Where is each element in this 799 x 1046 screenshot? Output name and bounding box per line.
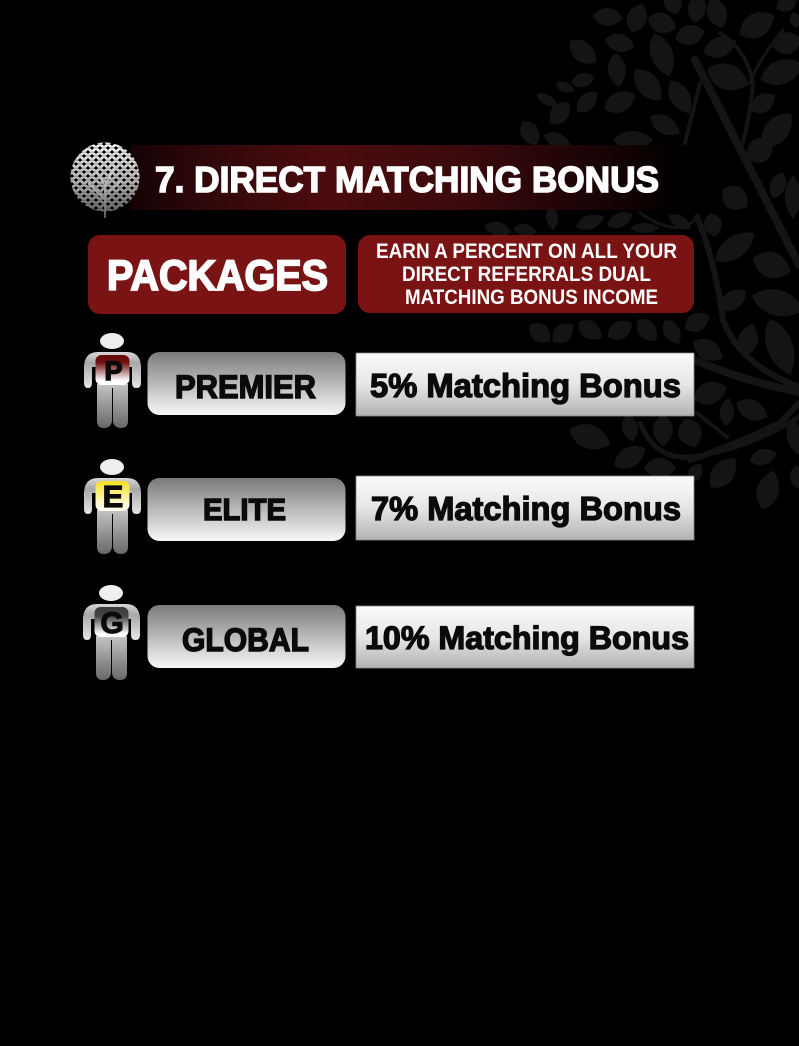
icon: person P xyxy=(84,333,141,428)
button: premier: PREMIER xyxy=(175,369,316,405)
row: elite xyxy=(84,459,694,554)
panel: earn description: MATCHING BONUS INCOME xyxy=(405,285,658,309)
icon: person E xyxy=(84,459,141,554)
panel: earn description xyxy=(358,235,694,313)
panel: earn description: DIRECT REFERRALS DUAL xyxy=(402,262,651,286)
title banner xyxy=(70,142,658,218)
panel: packages header xyxy=(88,235,346,314)
panel: packages header: PACKAGES xyxy=(107,252,328,300)
value: 7% xyxy=(356,476,694,540)
value: 5% xyxy=(356,353,694,416)
background tree watermark xyxy=(483,0,799,512)
icon: person E: E xyxy=(103,479,123,514)
button: global xyxy=(148,605,346,668)
panel: earn description: EARN A PERCENT ON ALL YOUR xyxy=(376,239,677,263)
icon: person G xyxy=(83,585,140,680)
row: global xyxy=(83,585,694,680)
button: global: GLOBAL xyxy=(182,622,309,658)
icon: person P: P xyxy=(104,356,123,386)
value: 7%: 7% Matching Bonus xyxy=(371,490,681,527)
title: 7. DIRECT MATCHING BONUS xyxy=(155,159,659,200)
icon: person G: G xyxy=(100,607,124,640)
value: 10%: 10% Matching Bonus xyxy=(365,620,689,656)
value: 5%: 5% Matching Bonus xyxy=(370,367,681,404)
button: elite xyxy=(148,478,346,541)
button: elite: ELITE xyxy=(203,492,286,527)
infographic canvas xyxy=(70,0,799,680)
button: premier xyxy=(148,352,346,415)
icon: tree logo xyxy=(70,142,140,218)
row: premier xyxy=(84,333,694,428)
value: 10% xyxy=(356,606,694,668)
